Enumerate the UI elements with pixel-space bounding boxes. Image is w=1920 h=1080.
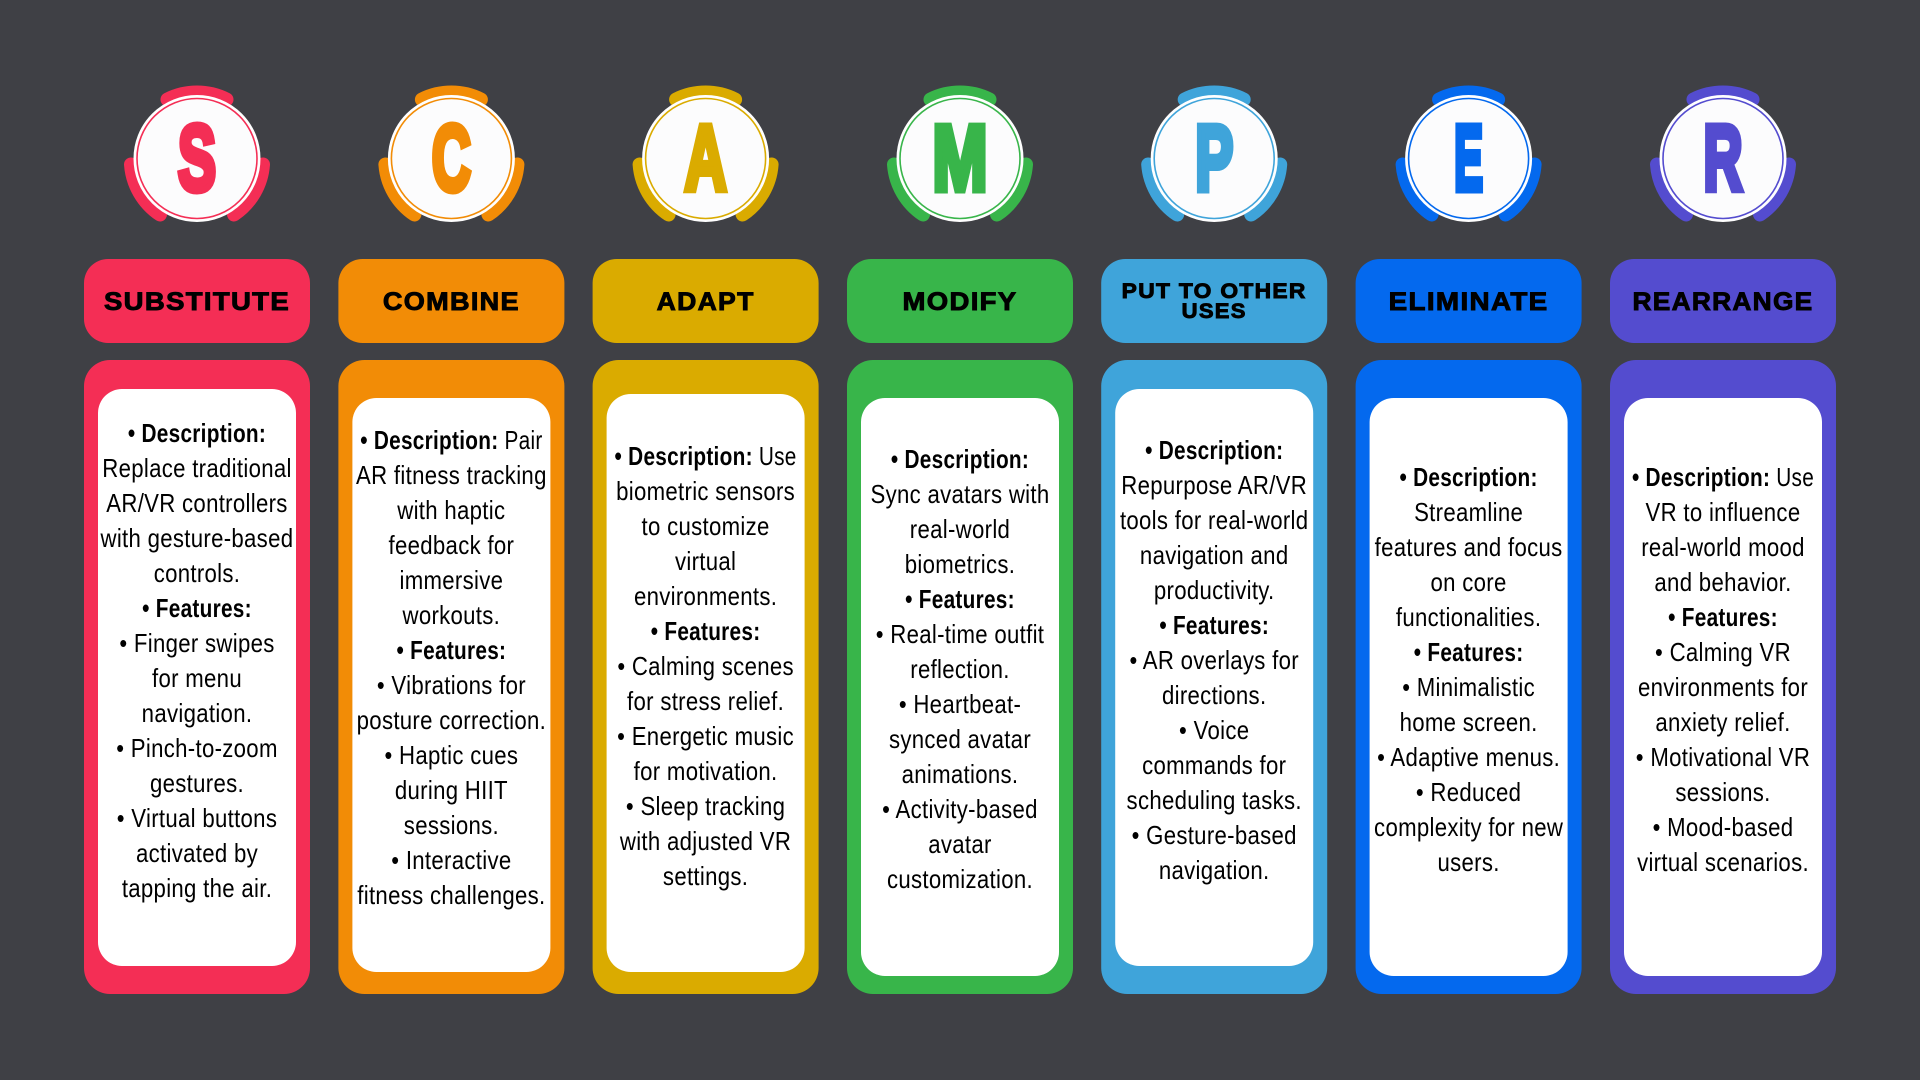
text: Put to other uses details: Repurpose AR/VR [1121,472,1307,500]
text: Modify details: • Features: [905,585,1015,613]
text: Combine details: fitness challenges. [357,882,546,910]
text: Combine details: immersive [400,567,503,595]
icon: letter P badge: P [1195,106,1233,210]
text: Put to other uses details: scheduling tasks. [1127,787,1302,815]
icon: letter E badge [1403,93,1535,221]
text: Eliminate details: on core [1431,569,1507,597]
text: Adapt details: • Sleep tracking [626,793,785,821]
heading: Put to other uses [1101,259,1327,343]
text: Eliminate details: features and focus [1375,534,1563,562]
text: Substitute details: for menu [152,665,242,693]
text: Rearrange details: • Mood-based [1653,814,1793,842]
text: Adapt details: biometric sensors [616,478,795,506]
text: Adapt details: virtual [675,548,736,576]
text: Substitute details: • Pinch-to-zoom [116,735,278,763]
column: Put to other uses [1101,93,1327,994]
text: Put to other uses details: • Voice [1179,717,1249,745]
text: Substitute details: navigation. [142,700,252,728]
panel: Combine details [338,360,564,994]
text: Put to other uses details: productivity. [1154,577,1275,605]
icon: letter M badge [894,93,1026,221]
text: Eliminate details: users. [1437,849,1500,877]
heading: Combine: COMBINE [383,288,520,316]
text: Rearrange details: and behavior. [1654,569,1792,597]
text: Put to other uses details: • Features: [1159,611,1269,639]
text: Combine details: feedback for [389,532,514,560]
text: Substitute details: Replace traditional [102,455,292,483]
text: Eliminate details: complexity for new [1374,814,1564,842]
text: Substitute details: controls. [154,560,240,588]
text: Rearrange details: real-world mood [1641,534,1805,562]
text: Adapt details: environments. [634,583,777,611]
text: Modify details: Sync avatars with [871,481,1049,509]
column: Combine [338,93,564,994]
text: Eliminate details: • Description: [1399,463,1538,491]
text: Rearrange details: virtual scenarios. [1637,849,1809,877]
column: Substitute [84,93,310,994]
text: Rearrange details: VR to influence [1646,499,1800,527]
text: Substitute details [100,419,293,903]
text: Adapt details: for stress relief. [627,688,784,716]
text: Put to other uses details [1120,436,1308,885]
text: Substitute details: • Finger swipes [119,630,275,658]
text: Adapt details: • Energetic music [617,723,794,751]
text: Modify details: • Activity-based [882,796,1038,824]
text: Eliminate details: • Adaptive menus. [1377,744,1560,772]
text: Put to other uses details: navigation. [1159,857,1270,885]
icon: letter R badge: R [1704,106,1742,210]
text: Eliminate details: Streamline [1414,499,1523,527]
text: Rearrange details: • Motivational VR [1636,744,1810,772]
heading: Substitute: SUBSTITUTE [104,288,290,316]
text: Put to other uses details: • AR overlays for [1129,647,1299,675]
icon: letter S badge [131,93,263,221]
text: Modify details: real-world [910,516,1010,544]
panel: Substitute details [84,360,310,994]
text: Eliminate details [1374,463,1564,877]
text: Substitute details: with gesture-based [100,525,293,553]
text: Modify details: • Heartbeat- [899,691,1021,719]
text: Combine details: sessions. [404,812,499,840]
text: Put to other uses details: tools for real-world [1120,507,1308,535]
text: Modify details: animations. [902,761,1018,789]
text: Adapt details: • Calming scenes [617,653,794,681]
text: Rearrange details: sessions. [1675,779,1771,807]
text: Rearrange details: anxiety relief. [1655,709,1791,737]
text: Adapt details: with adjusted VR [619,828,791,856]
text: Substitute details: AR/VR controllers [106,490,288,518]
text: Rearrange details: • Description: Use [1632,463,1814,491]
text: Combine details: workouts. [402,602,500,630]
text: Adapt details [615,442,797,891]
text: Put to other uses details: • Description: [1145,436,1283,464]
text: Adapt details: • Features: [651,617,760,645]
column: Eliminate [1356,93,1582,994]
heading: Put to other uses: USES [1182,300,1247,323]
heading: Adapt: ADAPT [657,288,755,316]
text: Combine details: during HIIT [395,777,508,805]
panel: Rearrange details [1610,360,1836,994]
text: Combine details: • Haptic cues [385,742,518,770]
icon: letter C badge [385,93,517,221]
text: Substitute details: • Description: [128,419,266,447]
heading: Rearrange [1610,259,1836,343]
text: Rearrange details: • Calming VR [1655,639,1791,667]
text: Substitute details: • Features: [142,594,252,622]
text: Eliminate details: • Features: [1414,638,1523,666]
text: Put to other uses details: commands for [1142,752,1286,780]
text: Substitute details: activated by [136,840,258,868]
column: Modify [847,93,1073,994]
text: Modify details: • Description: [891,445,1029,473]
panel: Eliminate details [1356,360,1582,994]
panel: Put to other uses details [1101,360,1327,994]
heading: Adapt [593,259,819,343]
text: Modify details [871,445,1049,894]
text: Substitute details: • Virtual buttons [117,805,277,833]
text: Substitute details: gestures. [150,770,244,798]
text: Put to other uses details: directions. [1162,682,1266,710]
text: Combine details: • Interactive [391,847,511,875]
heading: Modify: MODIFY [902,288,1018,316]
heading: Eliminate: ELIMINATE [1389,288,1549,316]
text: Eliminate details: functionalities. [1396,604,1541,632]
icon: letter E badge: E [1454,106,1483,210]
text: Adapt details: • Description: Use [615,442,797,470]
text: Modify details: synced avatar [889,726,1031,754]
text: Combine details: • Vibrations for [377,672,526,700]
text: Eliminate details: home screen. [1400,709,1538,737]
text: Modify details: • Real-time outfit [876,621,1044,649]
icon: letter P badge [1148,93,1280,221]
icon: letter A badge [640,93,772,221]
text: Eliminate details: • Reduced [1416,779,1521,807]
text: Substitute details: tapping the air. [122,875,272,903]
text: Combine details: • Description: Pair [360,426,543,454]
heading: Combine [338,259,564,343]
icon: letter R badge [1657,93,1789,221]
heading: Put to other uses: PUT TO OTHER [1122,280,1307,303]
heading: Rearrange: REARRANGE [1632,288,1814,316]
column: Rearrange [1610,93,1836,994]
text: Combine details: • Features: [397,636,506,664]
icon: letter S badge: S [178,106,216,210]
text: Eliminate details: • Minimalistic [1402,674,1535,702]
text: Modify details: avatar [928,831,992,859]
heading: Eliminate [1356,259,1582,343]
panel: Modify details [847,360,1073,994]
heading: Substitute [84,259,310,343]
heading: Modify [847,259,1073,343]
text: Combine details: with haptic [396,497,505,525]
text: Rearrange details: environments for [1638,674,1808,702]
text: Combine details [356,426,547,910]
text: Modify details: reflection. [910,656,1010,684]
text: Put to other uses details: • Gesture-based [1132,822,1297,850]
panel: Adapt details [593,360,819,994]
text: Rearrange details: • Features: [1668,603,1778,631]
text: Rearrange details [1632,463,1814,877]
text: Adapt details: settings. [663,863,748,891]
text: Put to other uses details: navigation and [1140,542,1288,570]
text: Combine details: posture correction. [357,707,546,735]
text: Adapt details: to customize [642,513,770,541]
text: Modify details: customization. [887,866,1033,894]
icon: letter A badge: A [685,106,727,210]
icon: letter M badge: M [932,106,988,210]
text: Modify details: biometrics. [905,551,1015,579]
column: Adapt [593,93,819,994]
text: Combine details: AR fitness tracking [356,462,547,490]
icon: letter C badge: C [432,106,471,210]
text: Adapt details: for motivation. [634,758,778,786]
